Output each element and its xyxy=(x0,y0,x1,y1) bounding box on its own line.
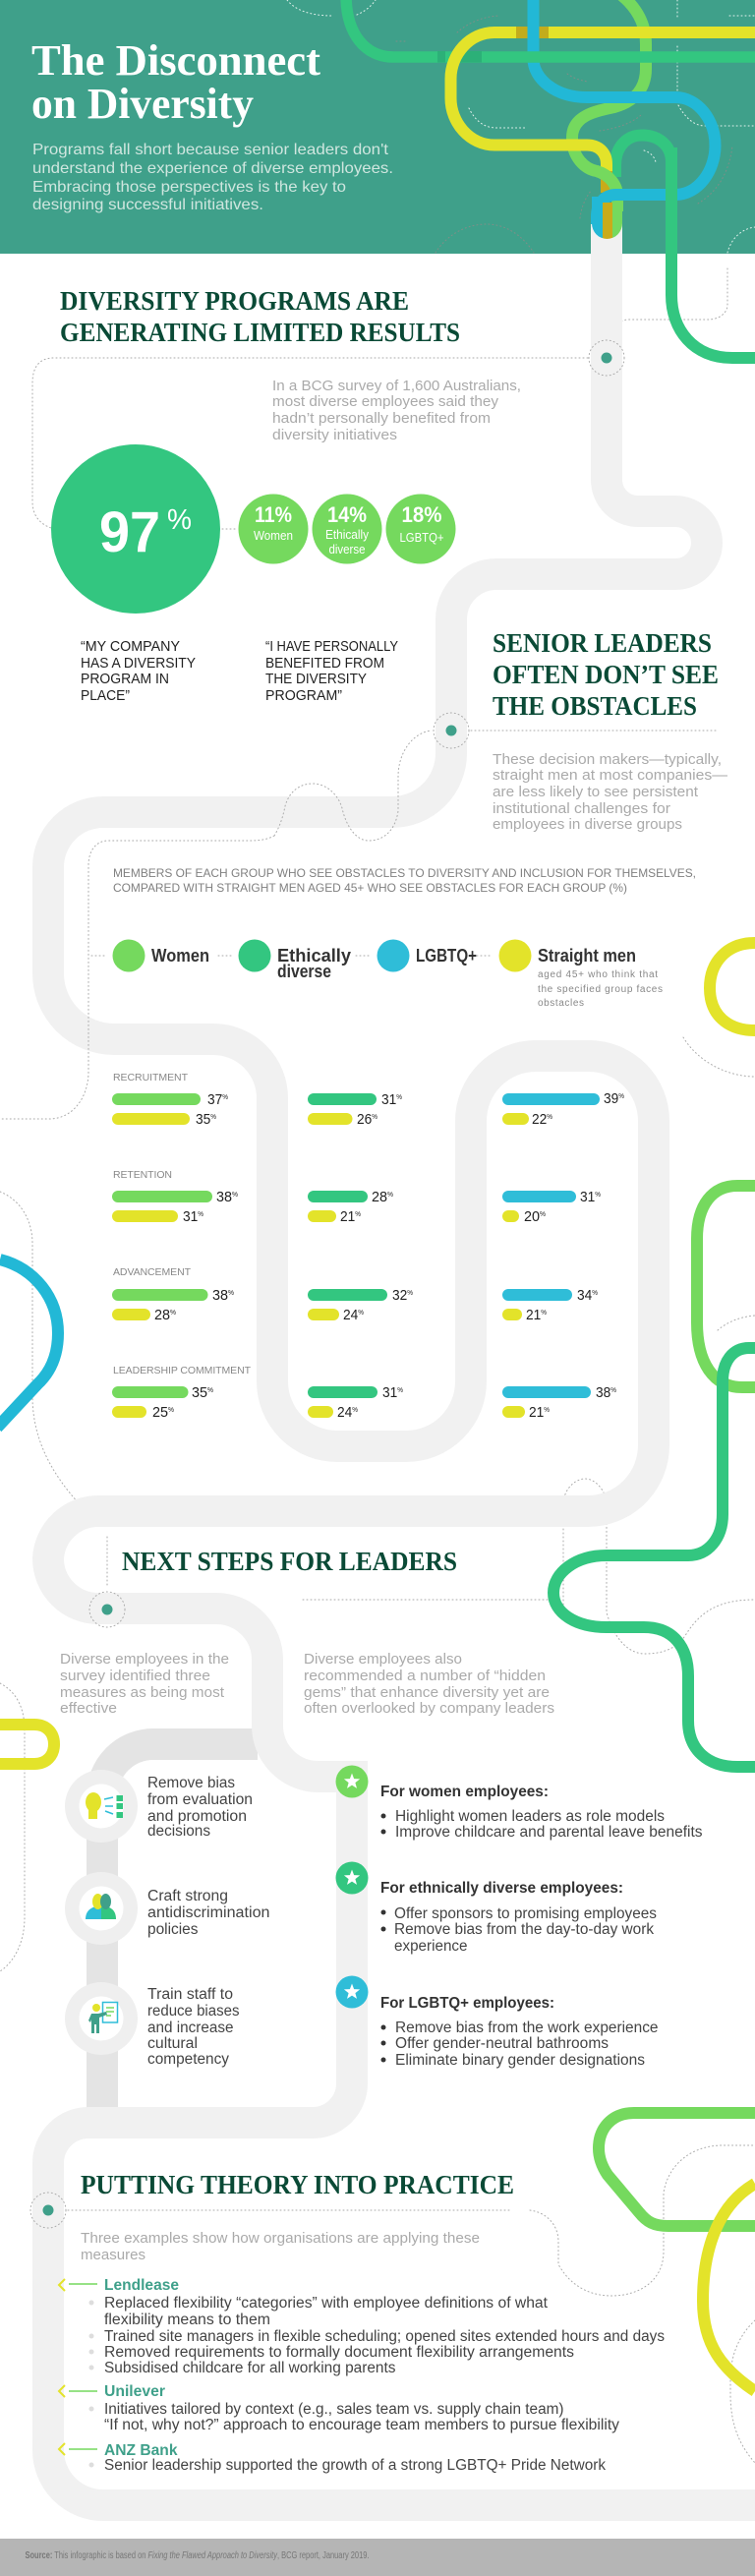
gems: ethnically diverse employees: For ethnically diverse employees: xyxy=(380,1880,623,1897)
survey text: most diverse employees said they xyxy=(272,393,499,410)
measure 3: train staff: Train staff to xyxy=(147,1986,233,2003)
bars: retention: 31 xyxy=(580,1189,597,1205)
pipe: cyan left xyxy=(0,1259,58,1428)
quote: company program: HAS A DIVERSITY xyxy=(81,655,196,672)
bars: recruitment: 39 xyxy=(604,1090,620,1107)
senior leaders paragraph: employees in diverse groups xyxy=(493,816,682,833)
pipe: light green bottom right xyxy=(599,2113,755,2226)
examples intro: measures xyxy=(81,2247,145,2263)
legend: ethnically diverse xyxy=(238,940,351,981)
quote: personally benefited: PROGRAM” xyxy=(265,687,342,704)
stat: ethnically diverse 14%: 14% xyxy=(327,502,367,527)
legend: LGBTQ+: LGBTQ+ xyxy=(416,946,477,966)
right paragraph xyxy=(304,1651,554,1717)
bars: recruitment: 26 xyxy=(357,1111,374,1128)
pipe ends xyxy=(592,197,622,239)
example: Lendlease: Lendlease xyxy=(104,2277,179,2294)
icon: head with checks xyxy=(86,1792,123,1819)
bars: advancement: 34 xyxy=(577,1287,594,1304)
stat: women 11% xyxy=(238,494,309,564)
heading: senior leaders xyxy=(493,628,719,721)
stat: ethnically diverse 14%: Ethically xyxy=(325,527,369,542)
example: Lendlease: Subsidised childcare for all working parents xyxy=(104,2360,396,2376)
legend: LGBTQ+ xyxy=(378,940,477,971)
legend xyxy=(91,940,663,1009)
bars: advancement: % xyxy=(592,1290,598,1297)
bars: retention: 20 xyxy=(524,1208,541,1225)
bars: advancement: % xyxy=(358,1310,364,1317)
measure 2: antidiscrimination xyxy=(65,1872,269,1945)
heading: diversity programs xyxy=(60,286,460,347)
bars: leadership commitment: 24 xyxy=(337,1404,354,1421)
bars: recruitment: % xyxy=(618,1093,624,1100)
example: Lendlease: Trained site managers in flexible scheduling; opened sites extended hours and days xyxy=(104,2328,665,2345)
legend: straight men: aged 45+ who think that xyxy=(538,969,658,980)
measure 1: remove bias xyxy=(65,1770,253,1843)
quote: company program: PLACE” xyxy=(81,687,130,704)
intro text: Embracing those perspectives is the key to xyxy=(32,179,346,196)
example: Lendlease: Replaced flexibility “categories” with employee definitions of what xyxy=(104,2295,549,2312)
bars: retention: % xyxy=(595,1192,601,1199)
bars: retention: 31 xyxy=(183,1208,200,1225)
bars: advancement: 32 xyxy=(392,1287,409,1304)
senior leaders paragraph xyxy=(493,751,727,833)
intro text: understand the experience of diverse employees. xyxy=(32,160,393,177)
dotted connector xyxy=(32,358,588,528)
gems: LGBTQ+ employees xyxy=(336,1976,659,2069)
row label: retention: RETENTION xyxy=(113,1169,172,1181)
pipe: green right winding xyxy=(553,1348,755,1767)
measure 1: remove bias: and promotion xyxy=(147,1808,247,1825)
left paragraph: effective xyxy=(60,1700,117,1717)
heading: senior leaders: OFTEN DON’T SEE xyxy=(493,660,719,689)
bars: recruitment: 35 xyxy=(196,1111,212,1128)
example: Lendlease xyxy=(59,2277,665,2376)
intro text: designing successful initiatives. xyxy=(32,197,263,213)
quote: personally benefited: “I HAVE PERSONALLY xyxy=(265,638,398,655)
right paragraph: recommended a number of “hidden xyxy=(304,1668,546,1684)
bars: advancement: % xyxy=(541,1310,547,1317)
bars: leadership commitment: % xyxy=(397,1387,403,1394)
title: The Disconnect xyxy=(31,36,320,85)
quote: company program xyxy=(81,638,196,704)
quote: personally benefited xyxy=(265,638,398,704)
legend: ethnically diverse: Ethically xyxy=(277,946,351,966)
left paragraph: measures as being most xyxy=(60,1684,225,1701)
example: ANZ Bank: Senior leadership supported the growth of a strong LGBTQ+ Pride Network xyxy=(104,2457,606,2474)
example: Unilever: “If not, why not?” approach to encourage team members to pursue flexibility xyxy=(104,2417,619,2433)
left paragraph xyxy=(60,1651,229,1717)
legend: women: Women xyxy=(151,946,209,966)
example: Lendlease: Removed requirements to formally document flexibility arrangements xyxy=(104,2344,574,2361)
footer bar xyxy=(0,2539,755,2576)
heading: diversity programs: GENERATING LIMITED RESULTS xyxy=(60,318,460,347)
secondary grey path xyxy=(102,1744,258,2114)
bars: retention xyxy=(112,1189,601,1225)
legend: straight men: obstacles xyxy=(538,998,584,1009)
intro text: Programs fall short because senior leaders don't xyxy=(32,142,389,158)
senior leaders paragraph: straight men at most companies— xyxy=(493,767,727,784)
measure 1: remove bias: Remove bias xyxy=(147,1775,235,1791)
pipe: light green right xyxy=(697,1186,755,1387)
route marker 4 xyxy=(30,2193,66,2228)
examples intro xyxy=(81,2230,480,2263)
decorative coloured pipes in header xyxy=(346,0,755,254)
row label: leadership commitment: LEADERSHIP COMMITMENT xyxy=(113,1365,252,1376)
example: Unilever: Unilever xyxy=(104,2383,165,2400)
left paragraph: Diverse employees in the xyxy=(60,1651,229,1668)
bars: leadership commitment: % xyxy=(544,1407,550,1414)
legend: straight men: Straight men xyxy=(538,946,636,966)
bars: recruitment: % xyxy=(372,1114,378,1121)
bars: advancement: 38 xyxy=(212,1287,229,1304)
bars: advancement: % xyxy=(228,1290,234,1297)
bars: advancement: 21 xyxy=(526,1307,543,1323)
example: ANZ Bank: ANZ Bank xyxy=(104,2442,178,2459)
stat: LGBTQ+ 18% xyxy=(385,494,456,564)
heading: next steps: NEXT STEPS FOR LEADERS xyxy=(122,1547,457,1576)
bars: advancement: % xyxy=(170,1310,176,1317)
bars: leadership commitment: 25 xyxy=(152,1404,169,1421)
pipe: green right xyxy=(671,246,755,358)
bars: recruitment: % xyxy=(547,1114,552,1121)
bars: leadership commitment: % xyxy=(207,1387,213,1394)
gems: women employees: Improve childcare and parental leave benefits xyxy=(395,1824,703,1841)
measure 3: train staff: competency xyxy=(147,2051,229,2068)
dotted rule xyxy=(68,2209,511,2211)
quote: personally benefited: BENEFITED FROM xyxy=(265,655,384,672)
survey text: In a BCG survey of 1,600 Australians, xyxy=(272,378,521,394)
bars: recruitment: % xyxy=(210,1114,216,1121)
icon: two overlapping people xyxy=(86,1894,116,1919)
legend: ethnically diverse: diverse xyxy=(277,962,331,981)
legend: straight men: the specified group faces xyxy=(538,984,663,995)
example: Unilever: Initiatives tailored by context (e.g., sales team vs. supply chain team) xyxy=(104,2401,564,2418)
dotted connectors xyxy=(0,731,718,1119)
bars: retention: % xyxy=(355,1211,361,1218)
bars: advancement: 24 xyxy=(343,1307,360,1323)
bars: advancement xyxy=(112,1287,598,1323)
measure 3: train staff xyxy=(65,1982,240,2068)
bars: retention: 28 xyxy=(372,1189,388,1205)
gems: LGBTQ+ employees: Eliminate binary gender designations xyxy=(395,2052,645,2069)
survey text: hadn’t personally benefited from xyxy=(272,410,491,427)
examples intro: Three examples show how organisations are applying these xyxy=(81,2230,480,2247)
bars: advancement: % xyxy=(407,1290,413,1297)
bars: leadership commitment: 21 xyxy=(529,1404,546,1421)
bars: leadership commitment: 31 xyxy=(382,1384,399,1401)
bars: retention: 38 xyxy=(216,1189,233,1205)
bars: recruitment: 37 xyxy=(207,1091,224,1108)
measure 1: remove bias: from evaluation xyxy=(147,1791,253,1808)
stat: ethnically diverse 14%: diverse xyxy=(328,542,366,556)
stat: 97%: % xyxy=(167,504,192,536)
measure 3: train staff: cultural xyxy=(147,2035,198,2052)
stat: LGBTQ+ 18%: 18% xyxy=(401,502,442,527)
measure 1: remove bias: decisions xyxy=(147,1823,210,1840)
quote: company program: “MY COMPANY xyxy=(81,638,180,655)
measure 2: antidiscrimination: antidiscrimination xyxy=(147,1904,269,1921)
bars: retention: % xyxy=(198,1211,203,1218)
measure 3: train staff: and increase xyxy=(147,2020,234,2036)
heading: senior leaders: THE OBSTACLES xyxy=(493,691,697,721)
right paragraph: gems” that enhance diversity yet are xyxy=(304,1684,550,1701)
gems: ethnically diverse employees xyxy=(336,1862,657,1955)
stat: ethnically diverse 14% xyxy=(313,494,381,564)
senior leaders paragraph: are less likely to see persistent xyxy=(493,784,699,800)
right paragraph: often overlooked by company leaders xyxy=(304,1700,554,1717)
quote: company program: PROGRAM IN xyxy=(81,671,169,687)
icon: presenter with board xyxy=(88,2002,118,2033)
bars: recruitment: 31 xyxy=(381,1091,398,1108)
measure 3: train staff: reduce biases xyxy=(147,2003,240,2020)
example: Lendlease: flexibility means to them xyxy=(104,2312,270,2328)
gems: ethnically diverse employees: Offer sponsors to promising employees xyxy=(394,1905,657,1922)
measure 2: antidiscrimination: policies xyxy=(147,1921,199,1938)
pipe: yellow ring right xyxy=(710,943,755,1030)
chart caption: MEMBERS OF EACH GROUP WHO SEE OBSTACLES TO DIVERSITY AND INCLUSION FOR THEMSELVES, xyxy=(113,866,696,880)
bars: retention: % xyxy=(387,1192,393,1199)
legend: straight men xyxy=(499,940,663,1009)
bars: recruitment: 22 xyxy=(532,1111,549,1128)
dotted link xyxy=(222,528,236,530)
survey text: diversity initiatives xyxy=(272,427,397,443)
gems: women employees: Highlight women leaders as role models xyxy=(395,1808,665,1825)
stat: LGBTQ+ 18%: LGBTQ+ xyxy=(399,530,444,545)
heading: putting theory into practice: PUTTING THEORY INTO PRACTICE xyxy=(81,2170,514,2199)
source note: Source: This infographic is based on Fixing the Flawed Approach to Diversity, BCG report, January 2019. xyxy=(26,2550,370,2561)
stat: women 11%: 11% xyxy=(255,502,292,527)
title xyxy=(31,36,320,128)
stat: 97%: 97 xyxy=(99,500,160,564)
row label: recruitment: RECRUITMENT xyxy=(113,1072,189,1083)
pipe: yellow bottom right xyxy=(703,2184,755,2391)
dotted rule xyxy=(303,1599,549,1601)
title: on Diversity xyxy=(31,80,254,128)
bars: retention: % xyxy=(232,1192,238,1199)
right paragraph: Diverse employees also xyxy=(304,1651,462,1668)
stat: 97% xyxy=(51,444,220,614)
row label: advancement: ADVANCEMENT xyxy=(113,1266,192,1278)
chart caption: COMPARED WITH STRAIGHT MEN AGED 45+ WHO SEE OBSTACLES FOR EACH GROUP (%) xyxy=(113,881,627,895)
left paragraph: survey identified three xyxy=(60,1668,210,1684)
bars: recruitment: % xyxy=(396,1094,402,1101)
bars: retention: 21 xyxy=(340,1208,357,1225)
bars: leadership commitment: 35 xyxy=(192,1384,208,1401)
route marker 2 xyxy=(434,713,469,748)
route marker 1 xyxy=(589,340,624,376)
gems: ethnically diverse employees: experience xyxy=(394,1938,468,1955)
bars: leadership commitment: % xyxy=(168,1407,174,1414)
header background xyxy=(0,0,755,254)
bars: leadership commitment: % xyxy=(352,1407,358,1414)
route marker 3 xyxy=(89,1592,125,1627)
stat: women 11%: Women xyxy=(254,528,293,543)
measure 2: antidiscrimination: Craft strong xyxy=(147,1888,228,1904)
senior leaders paragraph: These decision makers—typically, xyxy=(493,751,722,768)
quote: personally benefited: THE DIVERSITY xyxy=(265,671,367,687)
gems: ethnically diverse employees: Remove bias from the day-to-day work xyxy=(394,1921,654,1938)
legend: women xyxy=(112,940,209,971)
gems: LGBTQ+ employees: Remove bias from the work experience xyxy=(395,2020,659,2036)
senior leaders paragraph: institutional challenges for xyxy=(493,800,670,817)
bars: leadership commitment: 38 xyxy=(596,1384,612,1401)
heading: diversity programs: DIVERSITY PROGRAMS ARE xyxy=(60,286,409,316)
example: Unilever xyxy=(59,2383,619,2433)
bars: advancement: 28 xyxy=(154,1307,171,1323)
bars: leadership commitment xyxy=(112,1384,616,1421)
heading: senior leaders: SENIOR LEADERS xyxy=(493,628,712,658)
bars: recruitment xyxy=(112,1090,624,1128)
gems: women employees xyxy=(336,1766,703,1841)
pipe: yellow left xyxy=(0,1725,54,1764)
chart caption xyxy=(113,866,696,895)
gems: LGBTQ+ employees: Offer gender-neutral bathrooms xyxy=(395,2035,609,2052)
bars: leadership commitment: % xyxy=(610,1387,616,1394)
intro text xyxy=(32,142,393,213)
gems: women employees: For women employees: xyxy=(380,1784,549,1800)
bars: recruitment: % xyxy=(222,1094,228,1101)
bars: retention: % xyxy=(540,1211,546,1218)
example: ANZ Bank xyxy=(59,2442,606,2474)
survey text xyxy=(272,378,521,443)
gems: LGBTQ+ employees: For LGBTQ+ employees: xyxy=(380,1995,554,2012)
